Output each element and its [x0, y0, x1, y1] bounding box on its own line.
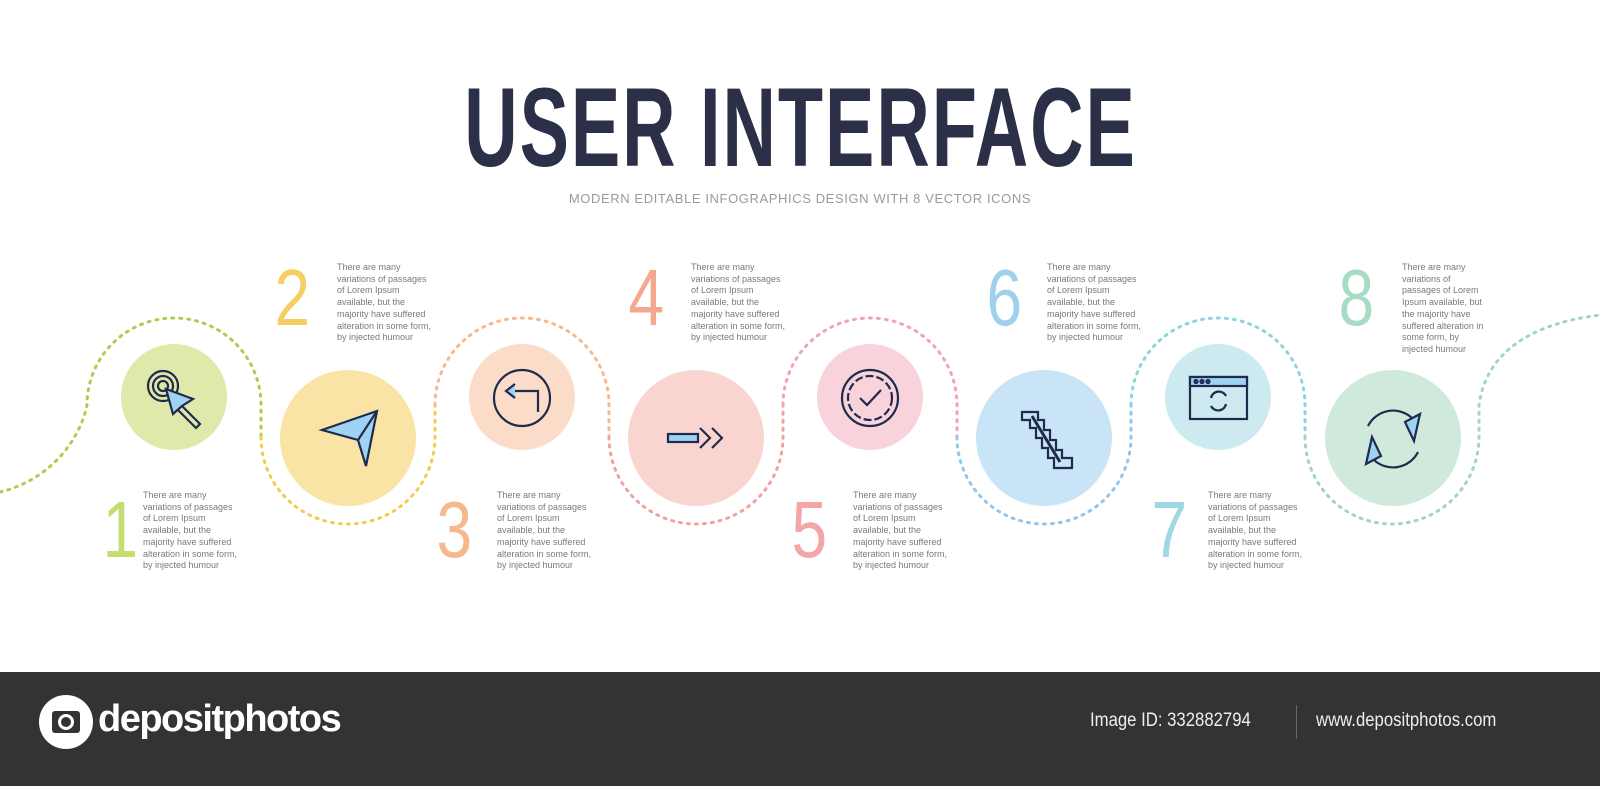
footer bar — [0, 672, 1600, 786]
text 6: There are many variations of passages of Lorem Ipsum available, but the majority have suffered alteration in some form, by injected humour — [1047, 262, 1141, 342]
step 7 circle with browser refresh icon — [1165, 344, 1271, 450]
number 8: 8 — [1338, 253, 1374, 342]
step 8 circle with sync arrows icon — [1325, 370, 1461, 506]
number 2: 2 — [274, 253, 310, 342]
text 3: There are many variations of passages of Lorem Ipsum available, but the majority have suffered alteration in some form, by injected humour — [497, 490, 591, 570]
footer logo — [39, 695, 340, 749]
text 2: There are many variations of passages of Lorem Ipsum available, but the majority have suffered alteration in some form, by injected humour — [337, 262, 431, 342]
number 7: 7 — [1151, 485, 1187, 574]
step 5 circle with check badge icon — [817, 344, 923, 450]
step 1 circle with cursor-target icon — [121, 344, 227, 450]
footer logo: depositphotos — [98, 698, 340, 740]
number 3: 3 — [436, 485, 472, 574]
text 1: There are many variations of passages of Lorem Ipsum available, but the majority have suffered alteration in some form, by injected humour — [143, 490, 237, 570]
text 7: There are many variations of passages of Lorem Ipsum available, but the majority have suffered alteration in some form, by injected humour — [1208, 490, 1302, 570]
website url: www.depositphotos.com — [1316, 710, 1496, 731]
text 4: There are many variations of passages of Lorem Ipsum available, but the majority have suffered alteration in some form, by injected humour — [691, 262, 785, 342]
image id text: Image ID: 332882794 — [1090, 710, 1251, 731]
number 1: 1 — [102, 485, 138, 574]
step 6 circle with stairs arrow icon — [976, 370, 1112, 506]
step 4 circle with double chevron icon — [628, 370, 764, 506]
icon: camera logo — [39, 695, 93, 749]
number 6: 6 — [986, 253, 1022, 342]
step 3 circle with return arrow icon — [469, 344, 575, 450]
text 8: There are many variations of passages of Lorem Ipsum available, but the majority have suffered alteration in some form, by injected humour — [1402, 262, 1483, 354]
text 5: There are many variations of passages of Lorem Ipsum available, but the majority have suffered alteration in some form, by injected humour — [853, 490, 947, 570]
number 5: 5 — [791, 485, 827, 574]
number 4: 4 — [628, 253, 664, 342]
step 2 circle with paper plane icon — [280, 370, 416, 506]
subtitle: MODERN EDITABLE INFOGRAPHICS DESIGN WITH 8 VECTOR ICONS — [569, 191, 1031, 206]
title: USER INTERFACE — [464, 65, 1136, 190]
